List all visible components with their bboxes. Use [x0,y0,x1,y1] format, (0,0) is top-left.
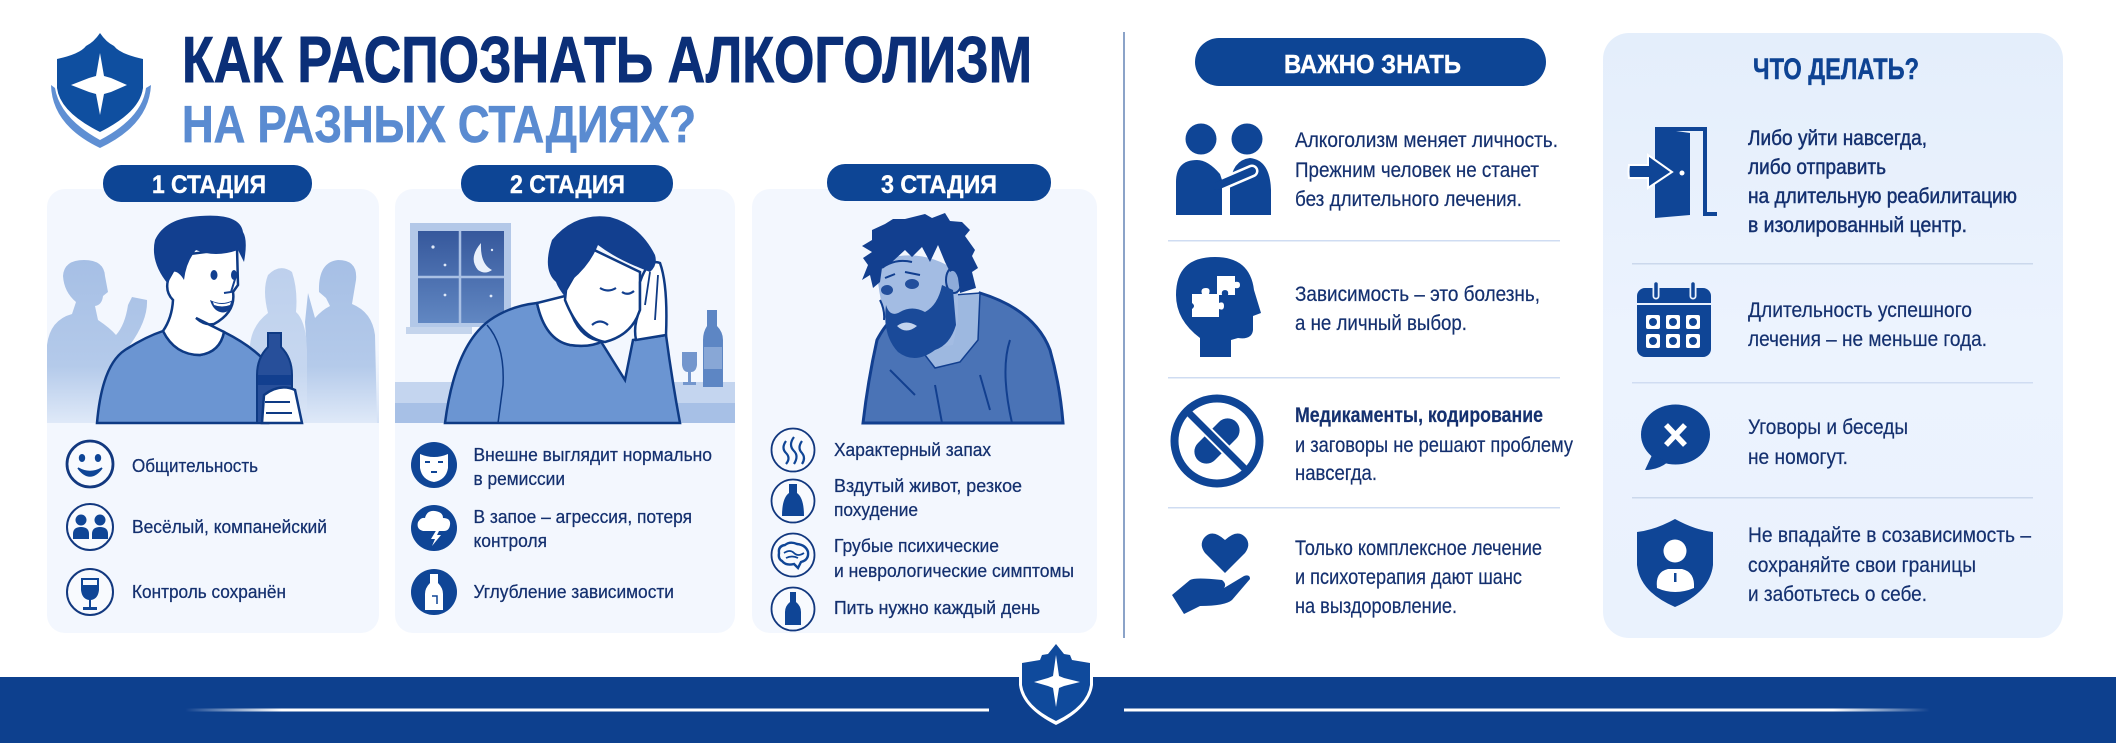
text: aggression: контроля [474,530,547,551]
panel: what to do [1603,33,2063,638]
icon: shield with person [1637,519,1713,607]
text: psychic symptoms [834,535,1074,581]
text: cheerful: Весёлый, компанейский [132,516,327,537]
text: psychic symptoms: и неврологические симптомы [834,560,1074,581]
title: КАК РАСПОЗНАТЬ АЛКОГОЛИЗМ [182,23,1032,96]
text: leave or rehab: либо отправить [1748,156,1886,179]
text: persuasion: Уговоры и беседы [1748,416,1908,439]
text: persuasion [1748,416,1908,469]
icon: wine glass [67,569,113,615]
text: aggression [474,506,692,551]
heading pill: ВАЖНО ЗНАТЬ [1284,49,1461,79]
text: personality: Прежним человек не станет [1295,159,1539,182]
icon: calendar [1637,284,1711,357]
text: persuasion: не номогут. [1748,446,1848,469]
icon: smiley [67,441,113,487]
panel: stage 1 [47,189,379,633]
illustration: sociable man with bottle [47,216,379,423]
icon: bottle [411,569,457,615]
heading pill [1195,38,1546,86]
text: disease [1295,283,1540,335]
text: aggression: В запое – агрессия, потеря [474,506,692,527]
icon: footer shield logo [1019,640,1093,725]
icon: no pills [1174,398,1260,484]
section: important to know [1168,38,1573,618]
icon: door with arrow [1628,127,1717,218]
text: medications: навсегда. [1295,462,1377,485]
heading: ЧТО ДЕЛАТЬ? [1753,53,1919,86]
text: codependency: Не впадайте в созависимость – [1748,524,2031,547]
text: smell: Характерный запах [834,439,992,460]
icon: two people supporting [1176,124,1271,215]
text: personality [1295,129,1558,211]
badge: stage 3: 3 СТАДИЯ [881,171,997,199]
icon: head with puzzle [1176,257,1261,357]
panel: stage 3 [752,189,1097,633]
text: complex treatment: и психотерапия дают шанс [1295,566,1522,589]
footer band [0,640,2116,743]
text: leave or rehab: на длительную реабилитацию [1748,185,2017,208]
text: personality: Алкоголизм меняет личность. [1295,129,1558,152]
icon: mask [411,442,457,488]
text: disease: а не личный выбор. [1295,312,1467,335]
badge: stage 2 [461,165,673,202]
text: duration: лечения – не меньше года. [1748,328,1987,351]
illustration: man at night holding head [395,216,735,423]
text: leave or rehab: Либо уйти навсегда, [1748,127,1927,150]
text: duration: Длительность успешного [1748,299,1972,322]
text: daily drinking: Пить нужно каждый день [834,597,1040,618]
text: codependency: и заботьтесь о себе. [1748,583,1927,606]
text: bloating [834,475,1022,520]
text: leave or rehab: в изолированный центр. [1748,214,1967,237]
text: looks normal: в ремиссии [474,468,565,489]
text: bloating: похудение [834,499,918,520]
text: personality: без длительного лечения. [1295,188,1522,211]
badge: stage 1: 1 СТАДИЯ [152,171,266,199]
text: looks normal [474,444,712,489]
text: psychic symptoms: Грубые психические [834,535,999,556]
text: duration [1748,299,1987,351]
text: medications: и заговоры не решают проблему [1295,434,1573,457]
icon: storm cloud [411,505,457,551]
text: codependency [1748,524,2031,606]
text: complex treatment: на выздоровление. [1295,595,1457,618]
title [182,23,1032,154]
text: leave or rehab [1748,127,2017,237]
panel: stage 2 [395,189,735,633]
text: codependency: сохраняйте свои границы [1748,554,1976,577]
icon: narrow bottle [772,588,814,630]
illustration: exhausted man [862,213,1063,423]
text: bloating: Вздутый живот, резкое [834,475,1022,496]
text: looks normal: Внешне выглядит нормально [474,444,712,465]
title: НА РАЗНЫХ СТАДИЯХ? [182,96,696,154]
icon: heart on hand [1172,533,1250,614]
text: disease: Зависимость – это болезнь, [1295,283,1540,306]
badge: stage 3 [827,164,1051,201]
icon: shield logo [51,33,151,148]
text: medications: Медикаменты, кодирование [1295,404,1543,427]
text: control kept: Контроль сохранён [132,581,286,602]
badge: stage 2: 2 СТАДИЯ [510,171,625,199]
icon: smell waves [772,428,814,472]
badge: stage 1 [103,165,312,202]
icon: brain [772,534,814,576]
icon: two people [67,504,113,550]
text: complex treatment [1295,537,1542,618]
icon: speech bubble with cross [1641,404,1710,470]
icon: wide bottle [772,480,814,522]
text: deepening: Углубление зависимости [474,581,674,602]
text: complex treatment: Только комплексное лечение [1295,537,1542,560]
text: sociability: Общительность [132,455,258,476]
text: medications [1295,404,1573,485]
